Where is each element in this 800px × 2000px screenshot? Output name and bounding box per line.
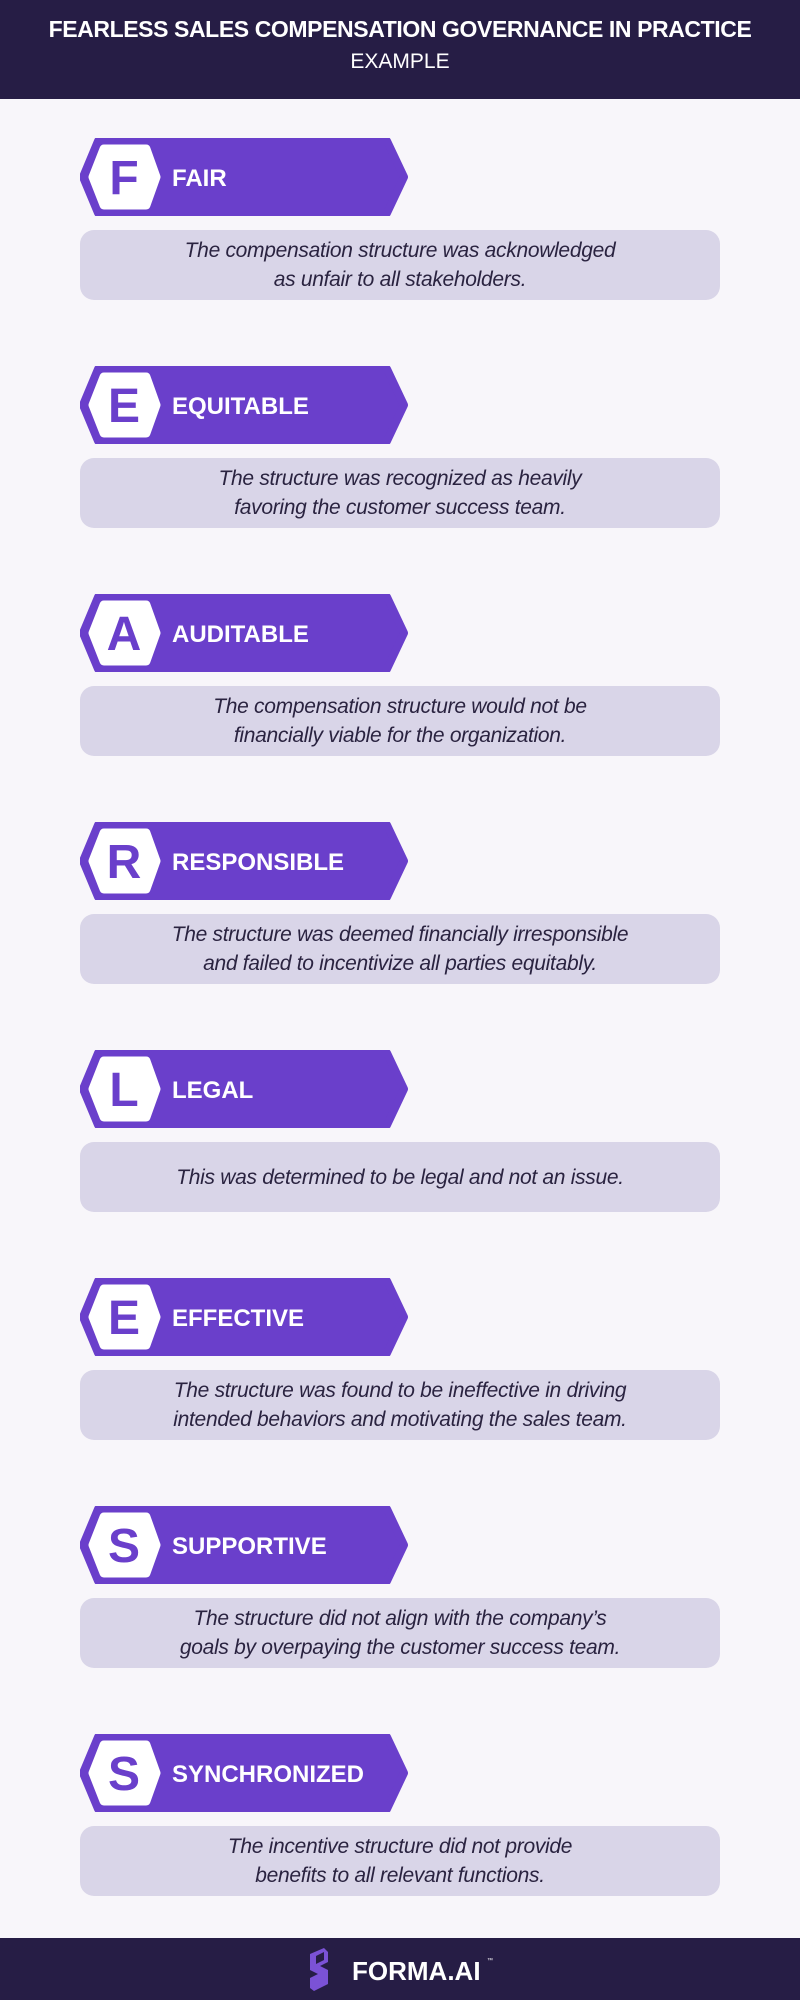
header: [0, 0, 800, 99]
description: [80, 1598, 720, 1668]
description: [80, 1142, 720, 1212]
description: The structure was found to be ineffective in driving: [174, 1379, 626, 1402]
description: intended behaviors and motivating the sales team.: [173, 1408, 627, 1431]
footer: [0, 1938, 800, 2000]
badge: S synchronized: SYNCHRONIZED: [172, 1761, 364, 1788]
badge: S supportive: S: [108, 1520, 140, 1573]
badge: A auditable: A: [107, 608, 141, 661]
description: as unfair to all stakeholders.: [274, 268, 526, 291]
subtitle: EXAMPLE: [350, 50, 450, 73]
badge: F fair: FAIR: [172, 165, 227, 192]
panel: responsible: [80, 822, 720, 984]
description: [80, 458, 720, 528]
badge: S supportive: SUPPORTIVE: [172, 1533, 327, 1560]
badge: S supportive: [80, 1506, 408, 1584]
description: [80, 1826, 720, 1896]
panel: equitable: [80, 366, 720, 528]
badge: F fair: [80, 138, 408, 216]
badge: R responsible: RESPONSIBLE: [172, 849, 344, 876]
description: The structure was deemed financially irresponsible: [172, 923, 628, 946]
title: FEARLESS SALES COMPENSATION GOVERNANCE IN PRACTICE: [49, 16, 751, 42]
badge: R responsible: [80, 822, 408, 900]
badge: E equitable: E: [108, 380, 140, 433]
description: This was determined to be legal and not an issue.: [176, 1166, 624, 1188]
badge: A auditable: [80, 594, 408, 672]
badge: L legal: LEGAL: [172, 1077, 253, 1104]
description: goals by overpaying the customer success team.: [180, 1636, 620, 1659]
description: financially viable for the organization.: [234, 724, 566, 747]
description: The compensation structure was acknowledged: [185, 239, 615, 262]
panel: legal: [80, 1050, 720, 1212]
panel: effective: [80, 1278, 720, 1440]
badge: E equitable: [80, 366, 408, 444]
description: The structure did not align with the company’s: [193, 1607, 607, 1630]
panel: synchronized: [80, 1734, 720, 1896]
panel: supportive: [80, 1506, 720, 1668]
panel: fair: [80, 138, 720, 300]
badge: L legal: L: [109, 1064, 139, 1117]
logo: ™: [487, 1957, 493, 1964]
description: and failed to incentivize all parties equitably.: [203, 952, 597, 975]
badge: R responsible: R: [107, 836, 141, 889]
description: The incentive structure did not provide: [228, 1835, 572, 1858]
badge: E equitable: EQUITABLE: [172, 393, 309, 420]
logo: FORMA.AI: [352, 1956, 481, 1986]
description: benefits to all relevant functions.: [255, 1864, 545, 1887]
description: [80, 230, 720, 300]
description: [80, 914, 720, 984]
logo: [310, 1948, 493, 1991]
badge: E effective: [80, 1278, 408, 1356]
description: [80, 1370, 720, 1440]
badge: S synchronized: [80, 1734, 408, 1812]
badge: S synchronized: S: [108, 1748, 140, 1801]
badge: E effective: EFFECTIVE: [172, 1305, 304, 1332]
badge: L legal: [80, 1050, 408, 1128]
panel: auditable: [80, 594, 720, 756]
description: [80, 686, 720, 756]
badge: E effective: E: [108, 1292, 140, 1345]
description: The structure was recognized as heavily: [218, 467, 581, 490]
badge: F fair: F: [109, 152, 139, 205]
description: favoring the customer success team.: [234, 496, 566, 519]
badge: A auditable: AUDITABLE: [172, 621, 309, 648]
description: The compensation structure would not be: [213, 695, 587, 718]
